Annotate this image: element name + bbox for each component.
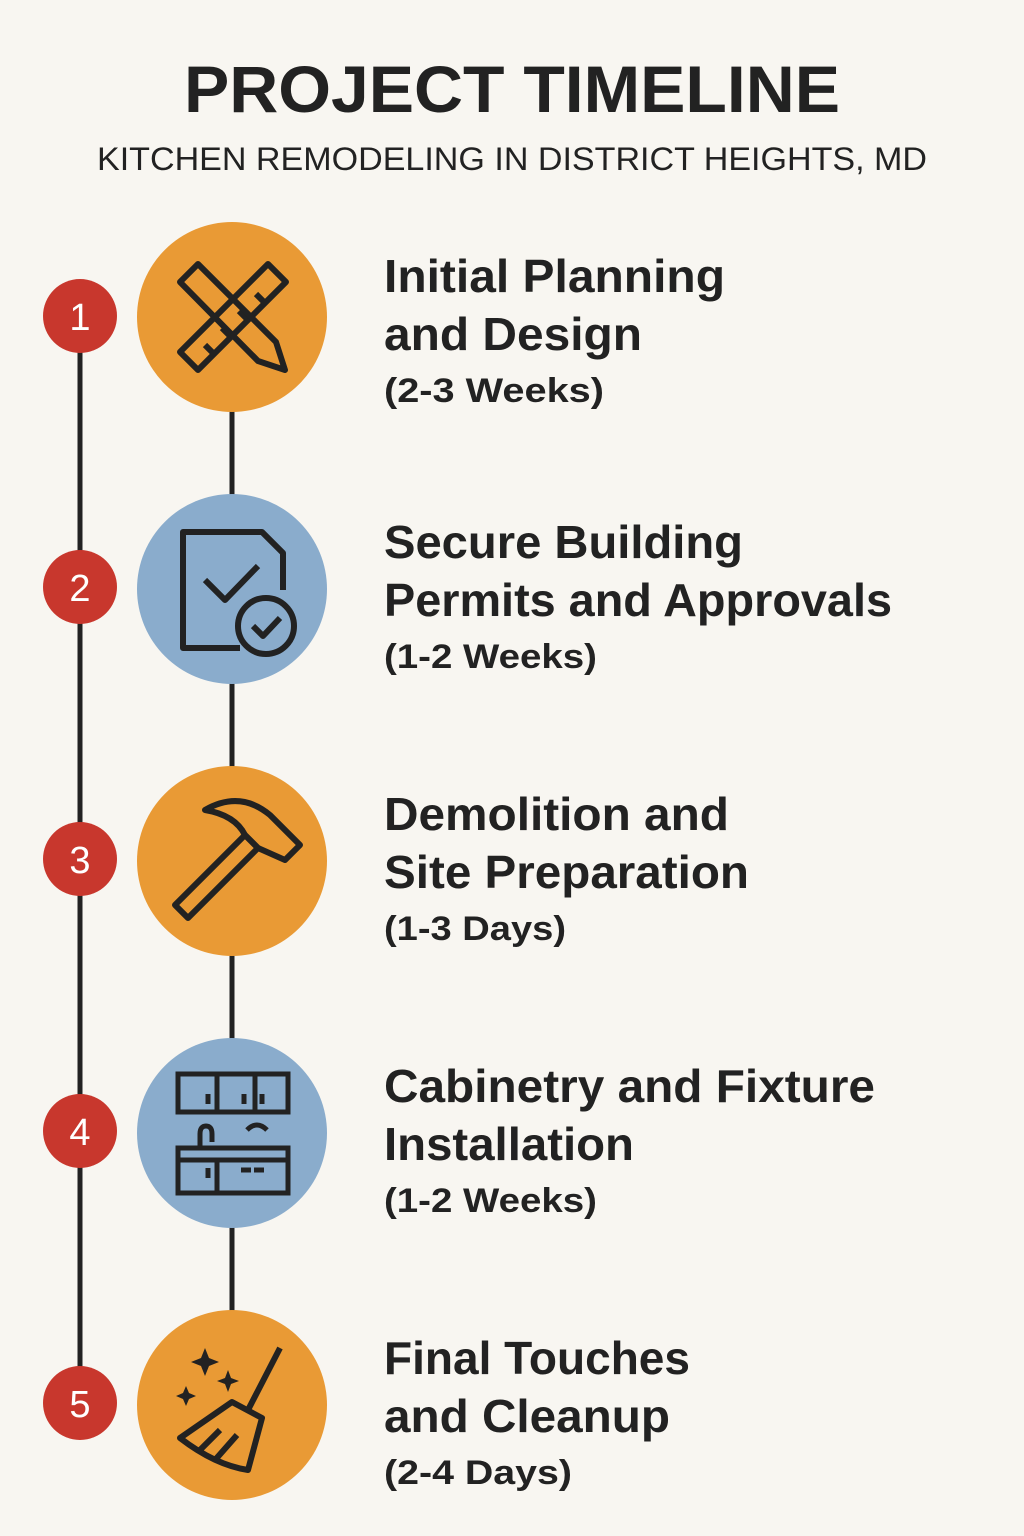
- icon: permit document: [137, 494, 327, 684]
- step 1: [43, 222, 725, 412]
- icon: cabinets: [137, 1038, 327, 1228]
- icon: hammer: [137, 766, 327, 956]
- number badge 3: 3: [69, 840, 91, 882]
- text 2: [384, 516, 892, 676]
- number badge 4: 4: [69, 1112, 91, 1154]
- number badge 1: [43, 279, 117, 353]
- text 3: Demolition and: [384, 788, 729, 840]
- text 2: Permits and Approvals: [384, 574, 892, 626]
- timeline line: [78, 316, 82, 1403]
- text 4: [384, 1060, 875, 1220]
- number badge 1: 1: [69, 297, 91, 339]
- text 2: Secure Building: [384, 516, 743, 568]
- icon: ruler and pencil: [137, 222, 327, 412]
- text 1: (2-3 Weeks): [384, 372, 604, 410]
- text 5: (2-4 Days): [384, 1454, 572, 1492]
- step 3: [43, 766, 749, 956]
- text 2: (1-2 Weeks): [384, 638, 597, 676]
- step 4: [43, 1038, 875, 1228]
- text 3: (1-3 Days): [384, 910, 566, 948]
- text 5: and Cleanup: [384, 1390, 670, 1442]
- number badge 3: [43, 822, 117, 896]
- number badge 2: [43, 550, 117, 624]
- subtitle: KITCHEN REMODELING IN DISTRICT HEIGHTS, MD: [97, 141, 927, 177]
- text 5: [384, 1332, 690, 1492]
- connectors: [230, 410, 234, 1311]
- number badge 4: [43, 1094, 117, 1168]
- text 4: (1-2 Weeks): [384, 1182, 597, 1220]
- text 1: Initial Planning: [384, 250, 725, 302]
- text 4: Cabinetry and Fixture: [384, 1060, 875, 1112]
- step 2: [43, 494, 892, 684]
- text 1: and Design: [384, 308, 642, 360]
- number badge 5: [43, 1366, 117, 1440]
- text 4: Installation: [384, 1118, 634, 1170]
- icon: broom and sparkles: [137, 1310, 327, 1500]
- text 3: [384, 788, 749, 948]
- number badge 5: 5: [69, 1384, 91, 1426]
- text 5: Final Touches: [384, 1332, 690, 1384]
- title: PROJECT TIMELINE: [184, 52, 840, 126]
- step 5: [43, 1310, 690, 1500]
- text 3: Site Preparation: [384, 846, 749, 898]
- text 1: [384, 250, 725, 410]
- number badge 2: 2: [69, 568, 91, 610]
